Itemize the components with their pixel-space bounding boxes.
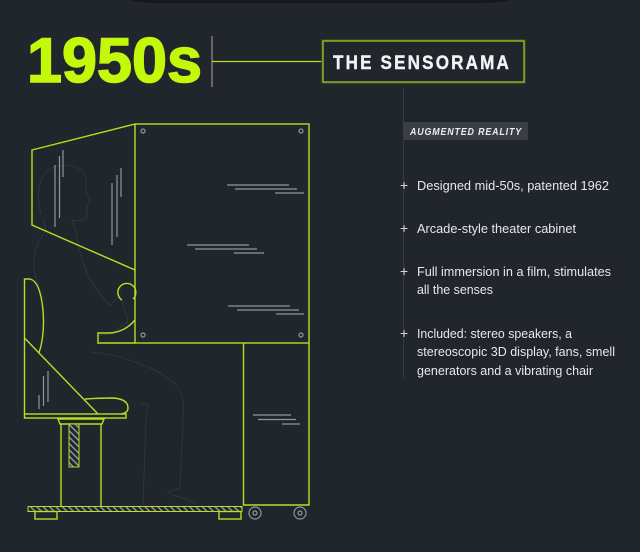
hand grip	[118, 283, 136, 300]
category tag	[403, 122, 528, 140]
pedestal post	[61, 424, 101, 506]
top edge shape	[130, 0, 510, 3]
bullet: included features: +	[400, 325, 408, 341]
bullet: immersion: all the senses	[417, 282, 493, 297]
illustration: Sensorama machine	[24, 124, 309, 519]
bullet: immersion: Full immersion in a film, stimulates	[417, 264, 611, 279]
title box	[323, 41, 524, 82]
bullet: included features: stereoscopic 3D display, fans, smell	[417, 344, 615, 359]
left foot	[35, 512, 57, 519]
connector from decade to title	[212, 36, 323, 87]
upper cabinet	[135, 124, 309, 343]
armrest shelf	[98, 320, 135, 343]
hatched base plate	[28, 506, 242, 512]
rear wheel	[294, 507, 306, 519]
hatched pedestal column	[69, 424, 79, 467]
cabinet rivets	[141, 129, 303, 337]
chair diagonal brace	[24, 338, 98, 414]
viewer hood	[32, 124, 135, 270]
bullet: included features: generators and a vibrating chair	[417, 363, 594, 378]
bullet: design date: +	[400, 177, 408, 193]
bullet: immersion: +	[400, 263, 408, 279]
heading: decade: 1950s	[27, 26, 202, 96]
glass reflection lines	[39, 150, 304, 424]
chair seat	[85, 398, 128, 414]
bullet: cabinet: Arcade-style theater cabinet	[417, 221, 576, 236]
front wheel	[249, 507, 261, 519]
bullet: cabinet: +	[400, 220, 408, 236]
bullet: included features: Included: stereo speakers, a	[417, 326, 573, 341]
lower cabinet	[244, 343, 309, 505]
bullet: design date: Designed mid-50s, patented 1962	[417, 178, 609, 193]
seat plate	[24, 414, 126, 418]
seated person silhouette	[34, 165, 195, 505]
bullet: immersion	[400, 263, 611, 297]
bullet: included features	[400, 325, 615, 378]
right foot	[219, 512, 241, 519]
chair pedestal cap	[58, 419, 104, 424]
category tag: AUGMENTED REALITY	[409, 126, 522, 138]
timeline vertical line	[402, 88, 404, 378]
title box: THE SENSORAMA	[333, 52, 511, 74]
chair back	[24, 279, 44, 414]
